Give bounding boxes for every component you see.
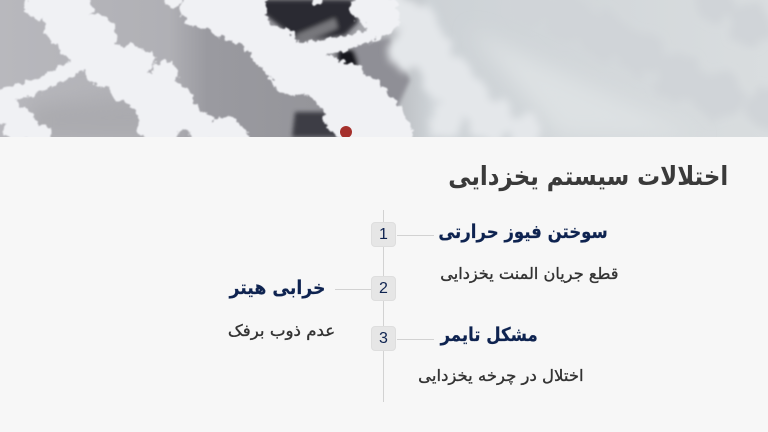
title: اختلالات سیستم یخزدایی — [448, 162, 728, 192]
connector 1 — [397, 235, 434, 236]
step 2 description: عدم ذوب برفک — [228, 321, 335, 340]
step 3 description: اختلال در چرخه یخزدایی — [419, 366, 584, 385]
step 1 number — [371, 222, 396, 247]
connector 2 — [335, 289, 372, 290]
step 3 heading: مشکل تایمر — [441, 324, 538, 346]
connector 3 — [397, 339, 434, 340]
step 2 number: 2 — [379, 280, 388, 297]
step 2 number — [371, 276, 396, 301]
step 3 number — [371, 326, 396, 351]
photo: frosted defrost coil banner — [0, 0, 768, 137]
step 1 number: 1 — [379, 226, 388, 243]
step 3 number: 3 — [379, 330, 388, 347]
step 2 heading: خرابی هیتر — [230, 277, 326, 299]
timeline — [335, 210, 434, 402]
step 1 description: قطع جریان المنت یخزدایی — [440, 264, 618, 283]
step 1 heading: سوختن فیوز حرارتی — [439, 221, 608, 243]
